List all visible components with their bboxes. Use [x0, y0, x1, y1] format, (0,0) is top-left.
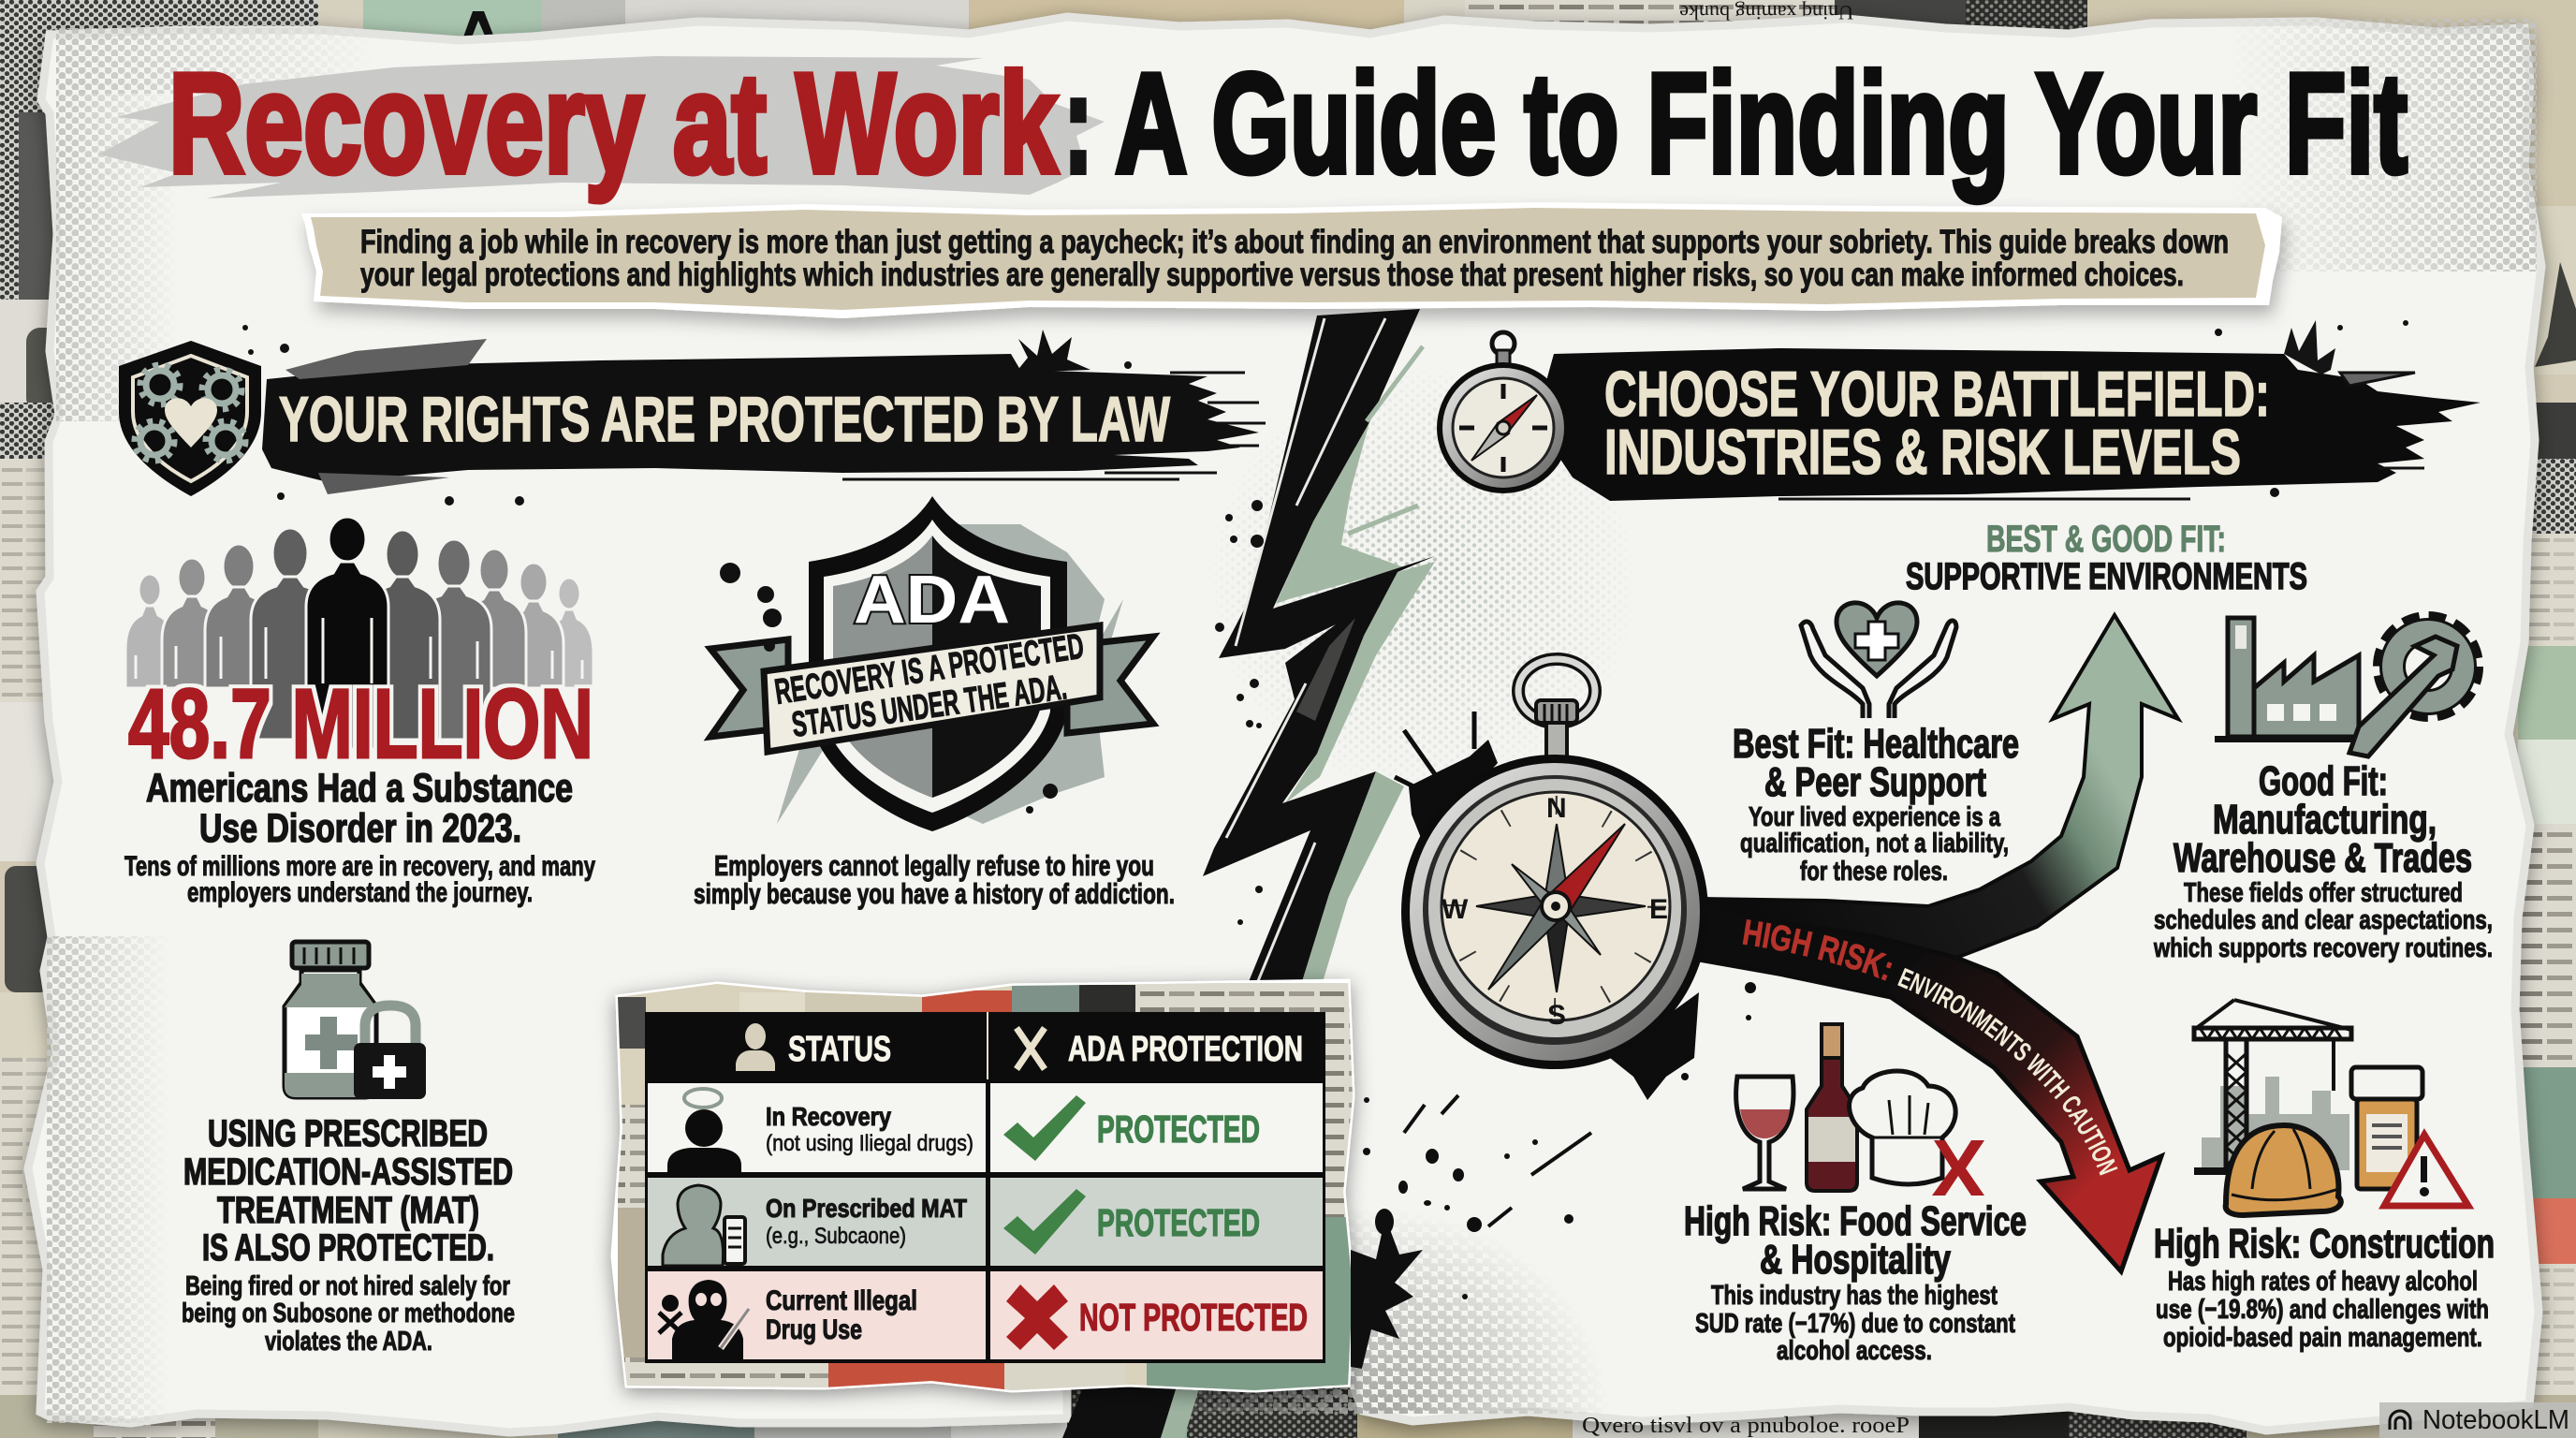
- compass letters: E: [1649, 894, 1668, 925]
- compass case: [1401, 755, 1708, 1069]
- MAT protection text: TREATMENT (MAT): [217, 1190, 479, 1231]
- row: on prescribed MAT: On Prescribed MAT: [766, 1194, 967, 1223]
- row: current illegal drug use: Current Illegal: [766, 1285, 917, 1316]
- heading: best and good fit: SUPPORTIVE ENVIRONMENTS: [1906, 556, 2307, 597]
- upside-down newspaper scraps: Qvero tisvl ov a pnuboloe. rooeP: [1582, 1414, 1910, 1438]
- icon: green check: [1003, 1189, 1086, 1255]
- risk: construction text: opioid-based pain management.: [2163, 1323, 2482, 1353]
- intro text: [360, 224, 2229, 293]
- NotebookLM watermark: [2379, 1402, 2576, 1438]
- title: [168, 44, 2408, 203]
- row: on prescribed MAT: PROTECTED: [1097, 1201, 1260, 1244]
- fit: manufacturing text: These fields offer structured: [2184, 878, 2463, 908]
- MAT protection text: IS ALSO PROTECTED.: [202, 1227, 494, 1269]
- ribbon text: STATUS UNDER THE ADA.: [789, 668, 1069, 745]
- icon: factory gear and wrench: [2215, 618, 2475, 756]
- MAT protection text: USING PRESCRIBED: [208, 1113, 488, 1154]
- icon: crane hardhat pills warning: [2194, 1000, 2468, 1215]
- fit: manufacturing text: Warehouse & Trades: [2174, 835, 2472, 881]
- icon: caring hands with heart: [1801, 603, 1956, 718]
- fit: manufacturing text: Good Fit:: [2259, 758, 2388, 804]
- risk: food service text: High Risk: Food Service: [1684, 1198, 2027, 1244]
- icon: green check: [1003, 1095, 1086, 1161]
- ink splatter lower centre: [1351, 1095, 1591, 1369]
- row: on prescribed MAT: [648, 1178, 1323, 1266]
- stat: people silhouettes: [125, 517, 593, 749]
- MAT protection text: violates the ADA.: [265, 1327, 432, 1357]
- heading: your rights: [119, 330, 1266, 496]
- risk: food service text: SUD rate (−17%) due to constant: [1695, 1309, 2015, 1339]
- intro banner: [301, 202, 2282, 318]
- row: in recovery: In Recovery: [766, 1102, 891, 1131]
- stat description: Tens of millions more are in recovery, and many: [124, 851, 595, 882]
- ink splatter around compass: [1395, 712, 1756, 1100]
- icon: person with halo: [667, 1089, 741, 1172]
- ribbon text: [772, 627, 1087, 745]
- fit: healthcare text: [1733, 721, 2019, 887]
- MAT protection text: MEDICATION-ASSISTED: [183, 1152, 513, 1193]
- table header: STATUS: [788, 1030, 891, 1069]
- MAT protection text: being on Subosone or methodone: [182, 1299, 515, 1328]
- MAT protection text: [182, 1113, 515, 1357]
- lightning bolt divider: [1062, 309, 1435, 1438]
- ADA description: [694, 849, 1175, 910]
- row: current illegal drug use: NOT PROTECTED: [1079, 1296, 1308, 1339]
- title brush stroke: [98, 56, 1105, 198]
- heading: best and good fit: [1906, 519, 2307, 597]
- arrow label: high risk: HIGH RISK:: [1743, 919, 1893, 981]
- heading: choose your battlefield: INDUSTRIES & RISK LEVELS: [1604, 417, 2241, 488]
- icon: skull and syringe: [659, 1280, 749, 1359]
- splatter behind shield: [777, 524, 1123, 824]
- title: Recovery at Work: [168, 44, 1058, 203]
- ADA description: simply because you have a history of addiction.: [694, 877, 1175, 910]
- ribbon band: [764, 625, 1100, 752]
- risk: food service text: alcohol access.: [1777, 1336, 1932, 1366]
- heading: choose your battlefield: [1437, 320, 2481, 501]
- risk: construction text: [2154, 1221, 2495, 1353]
- MAT protection text: Being fired or not hired salely for: [185, 1271, 510, 1301]
- row: on prescribed MAT: (e.g., Subcaone): [766, 1224, 906, 1249]
- row: current illegal drug use: [648, 1271, 1323, 1359]
- icon: person with medicine vial: [663, 1185, 745, 1266]
- ADA shield badge: [710, 496, 1153, 831]
- torn collage backing: [613, 981, 1353, 1390]
- ink dots near rights heading: [242, 325, 1132, 506]
- icon: medication bottle and lock: [285, 942, 426, 1099]
- fit: healthcare text: & Peer Support: [1764, 759, 1986, 805]
- row: current illegal drug use: Drug Use: [766, 1314, 862, 1345]
- arrow label: environments with caution: ENVIRONMENTS WITH CAUTION: [1897, 968, 2117, 1176]
- arrow: supportive green path: [1699, 615, 2178, 958]
- risk: food service text: This industry has the highest: [1711, 1281, 1998, 1311]
- icon: wine bottle chef hat: [1736, 1024, 1984, 1196]
- ribbon tails: [710, 639, 788, 737]
- heading text: rights: YOUR RIGHTS ARE PROTECTED BY LAW: [279, 384, 1171, 455]
- risk: construction text: Has high rates of heavy alcohol: [2168, 1267, 2478, 1297]
- upside-down newspaper scraps: Uninq xaming bunke: [1679, 1, 1853, 24]
- risk: food service text: & Hospitality: [1760, 1237, 1951, 1283]
- shield: [809, 496, 1067, 831]
- fit: healthcare text: qualification, not a liability,: [1740, 829, 2009, 858]
- fit: healthcare text: Best Fit: Healthcare: [1733, 721, 2019, 767]
- ADA description: Employers cannot legally refuse to hire you: [714, 849, 1154, 882]
- panel: ADA status table: [613, 981, 1353, 1395]
- icon: shield with gears and heart: [119, 341, 261, 496]
- heading text: battlefield: CHOOSE YOUR BATTLEFIELD:: [1604, 359, 2270, 430]
- brush stroke: battlefield heading: [1535, 348, 2481, 501]
- compass letters: W: [1442, 894, 1469, 925]
- icon: red X: [1006, 1284, 1068, 1350]
- table header: ADA PROTECTION: [1068, 1030, 1303, 1069]
- stat description: Use Disorder in 2023.: [199, 806, 521, 851]
- table frame: [645, 1012, 1325, 1363]
- fit: manufacturing text: Manufacturing,: [2213, 797, 2437, 843]
- brush stroke: rights heading: [262, 354, 1259, 482]
- ribbon text: RECOVERY IS A PROTECTED: [772, 627, 1087, 712]
- compass ring and crown: [1518, 659, 1595, 758]
- fit: manufacturing text: [2153, 758, 2493, 963]
- table header: [736, 1012, 1303, 1079]
- fit: healthcare text: for these roles.: [1800, 857, 1948, 887]
- compass letters: S: [1547, 1000, 1566, 1031]
- risk: food service text: [1684, 1198, 2027, 1366]
- title: :: [1063, 44, 1093, 203]
- stat description: employers understand the journey.: [187, 877, 533, 908]
- compass letters: N: [1546, 793, 1567, 824]
- icon: status person: [736, 1023, 775, 1071]
- NotebookLM watermark: NotebookLM: [2422, 1405, 2569, 1435]
- row: in recovery: PROTECTED: [1097, 1108, 1260, 1151]
- compass letters: [1442, 793, 1668, 1031]
- icon: small compass: [1437, 332, 1570, 493]
- icon: big compass: [1395, 659, 1756, 1100]
- stat: 48.7 million: 48.7 MILLION: [128, 669, 593, 779]
- row: in recovery: [648, 1083, 1323, 1172]
- stat description: Americans Had a Substance: [146, 766, 573, 811]
- heading: best and good fit: BEST & GOOD FIT:: [1986, 519, 2226, 560]
- icon: crossed tools: [1017, 1028, 1045, 1069]
- upside-down newspaper scraps: [1582, 1, 1910, 1438]
- compass rose: [1476, 824, 1646, 992]
- ADA lettering: ADA: [854, 563, 1010, 638]
- fit: healthcare text: Your lived experience is a: [1749, 802, 2001, 832]
- arrow: high risk red path: [1700, 919, 2166, 1276]
- risk: construction text: use (−19.8%) and challenges with: [2156, 1295, 2489, 1325]
- stat description: [124, 766, 595, 908]
- row: in recovery: (not using Iliegal drugs): [766, 1131, 973, 1156]
